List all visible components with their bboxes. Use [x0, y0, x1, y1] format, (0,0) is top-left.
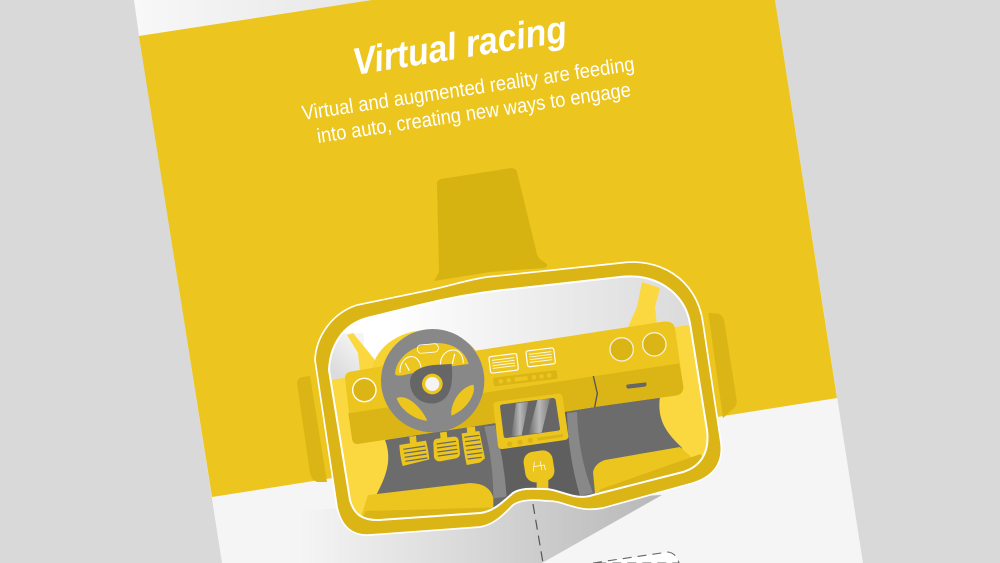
- centre console: [483, 410, 582, 503]
- title: Virtual racing: [350, 9, 570, 84]
- wheel hub: [410, 364, 452, 404]
- VR headset: [297, 262, 737, 535]
- dashboard button strip: [493, 370, 558, 386]
- right round vent one: [610, 338, 633, 361]
- dashed card below headset: [593, 552, 679, 563]
- left round vent: [353, 378, 376, 402]
- yellow panel: [139, 0, 837, 497]
- pedal left: [399, 436, 429, 466]
- right seat: [593, 447, 697, 493]
- air vent right: [526, 348, 556, 367]
- headset shadow: [300, 495, 662, 563]
- right gauge: [441, 350, 463, 366]
- headset top strap: [434, 168, 547, 281]
- page sheet: [134, 0, 863, 563]
- console right band: [567, 412, 593, 496]
- left gauge: [400, 357, 421, 373]
- cowl behind wheel: [372, 330, 476, 368]
- gear shifter: [524, 450, 554, 488]
- left windscreen pillar: [347, 333, 375, 370]
- glovebox handle: [626, 382, 646, 389]
- right strap: [708, 313, 737, 418]
- left seat edge: [364, 508, 492, 519]
- right round vent two: [643, 333, 666, 356]
- left strap: [297, 376, 327, 482]
- instrument cluster: [395, 343, 469, 376]
- subtitle: into auto, creating new ways to engage: [315, 78, 632, 148]
- subtitle: [300, 53, 636, 148]
- speed indicator: [417, 343, 439, 354]
- subtitle: Virtual and augmented reality are feeding: [300, 53, 636, 125]
- air vent left: [489, 353, 519, 373]
- pedal right: [462, 427, 485, 465]
- lower cabin: [327, 322, 710, 527]
- right seat edge: [599, 454, 702, 492]
- lens contents: [327, 270, 710, 527]
- dashed road line: [533, 504, 543, 563]
- glovebox seam: [593, 376, 597, 407]
- right windscreen pillar: [627, 282, 660, 330]
- left seat: [362, 483, 494, 516]
- console left band: [484, 425, 507, 498]
- dashboard lower half: [348, 363, 683, 444]
- windscreen: [344, 277, 690, 368]
- lens outline: [329, 276, 708, 520]
- left spoke cutout: [397, 397, 427, 421]
- centre screen unit: [493, 394, 568, 449]
- floor: [376, 398, 682, 508]
- horn ring: [422, 374, 443, 394]
- right spoke cutout: [451, 385, 474, 416]
- horn centre: [425, 377, 439, 391]
- left windscreen corner: [330, 334, 364, 380]
- dashboard: [345, 322, 683, 444]
- top corner of the sheet: [134, 0, 372, 36]
- headset body: [315, 262, 721, 535]
- pedal middle: [433, 432, 460, 461]
- steering wheel: [381, 329, 484, 432]
